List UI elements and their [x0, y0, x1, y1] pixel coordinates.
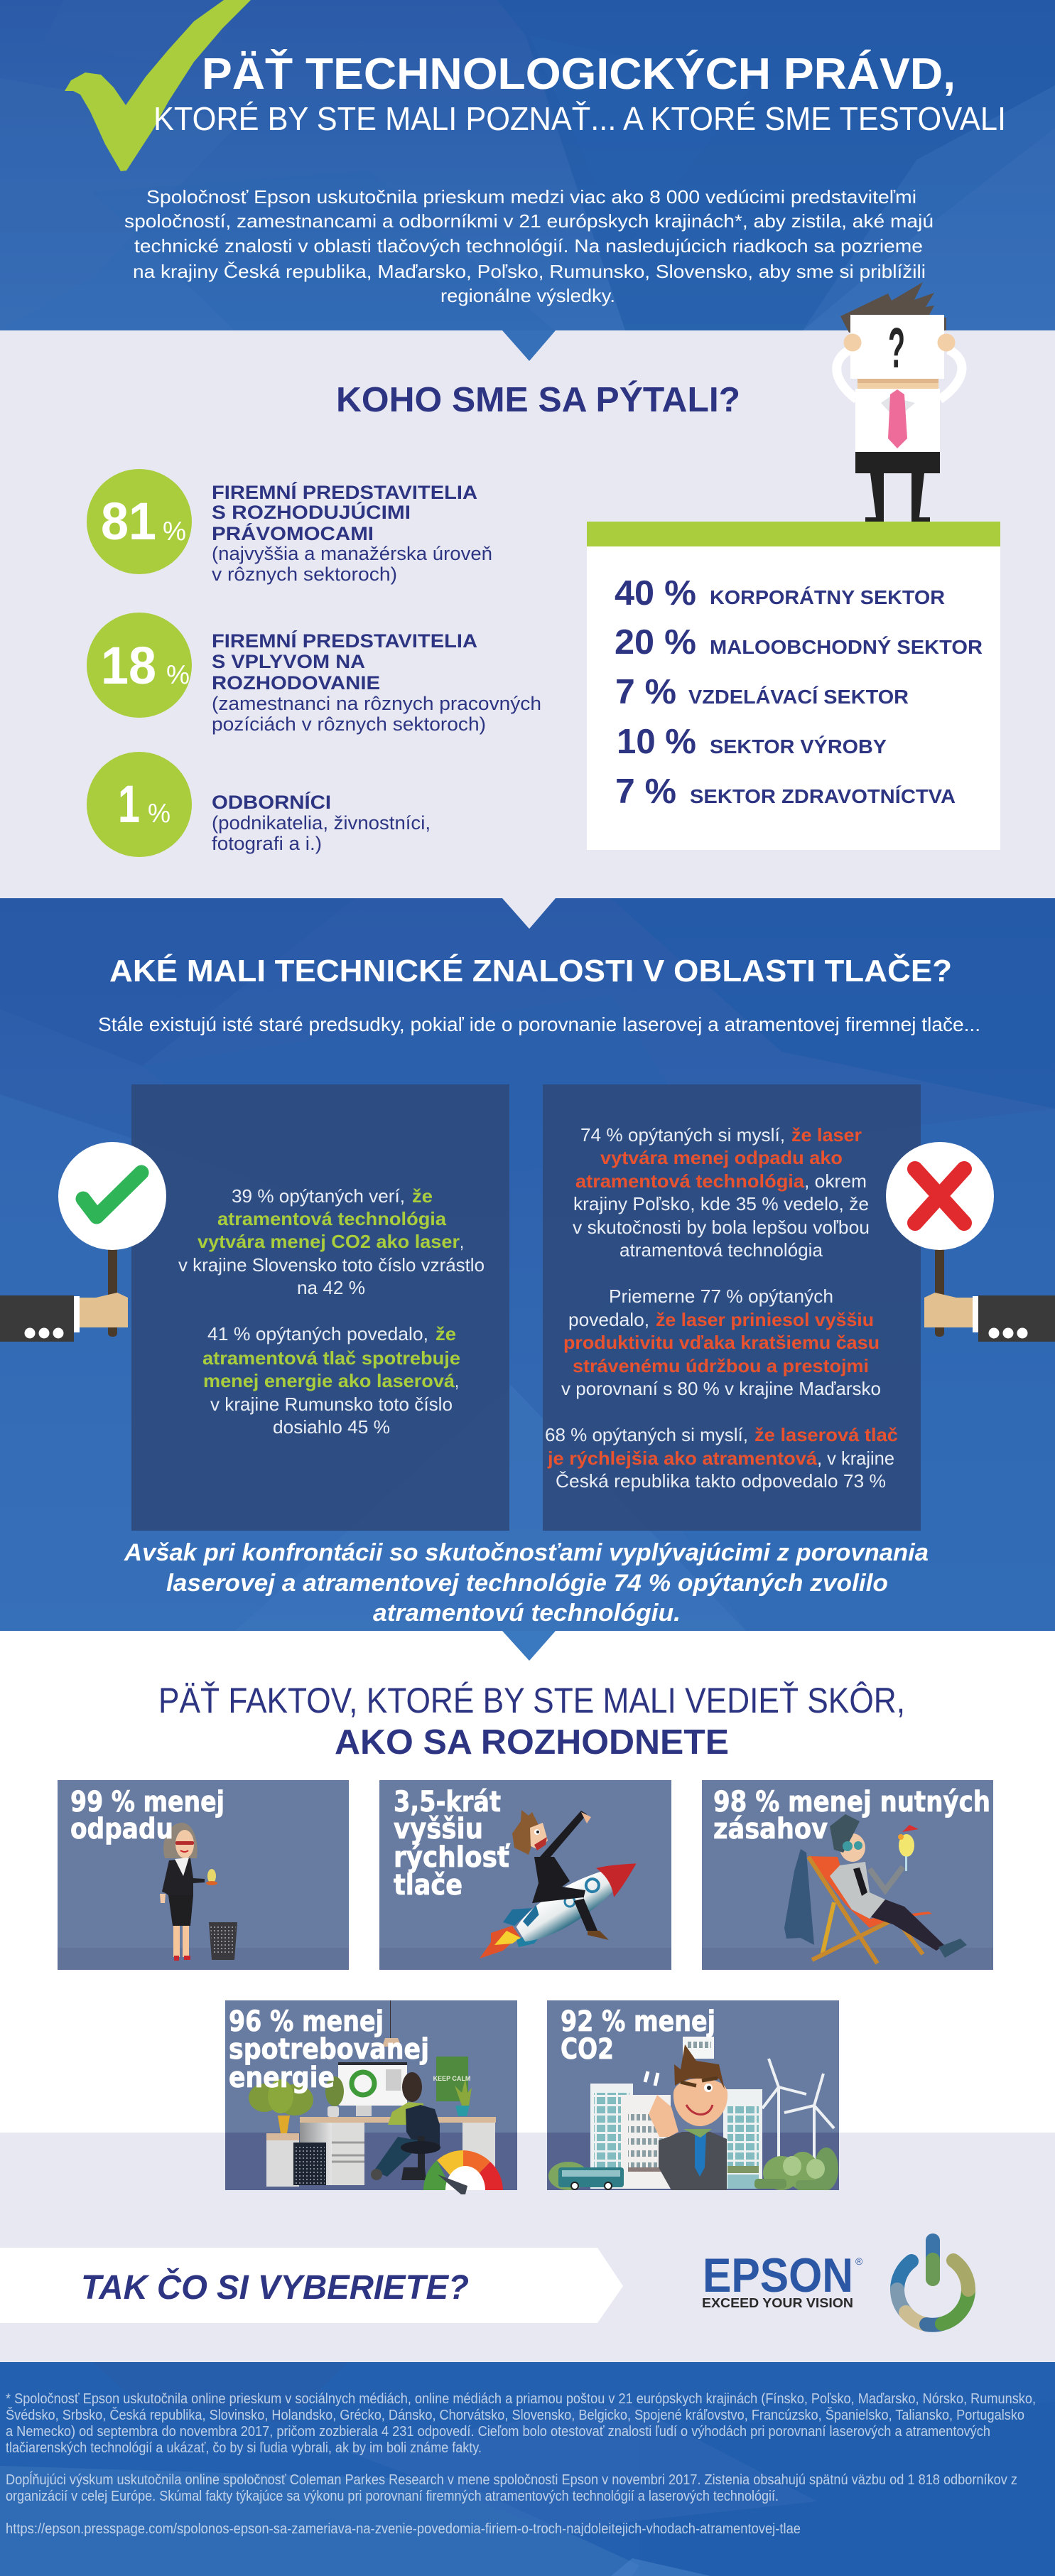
panel: wrong beliefs: krajiny Poľsko, kde 35 % vedelo, že [573, 1193, 869, 1214]
card: 92 percent less CO2: CO2 [561, 2033, 614, 2066]
card: 3.5 times faster: 3,5-krát [394, 1786, 501, 1818]
panel: correct beliefs: vytvára menej CO2 ako laser [198, 1231, 460, 1252]
banner: tak co si vyberiete [0, 2248, 623, 2323]
stat: 81 percent: FIREMNÍ PREDSTAVITELIA [212, 481, 477, 503]
icon: hand holding check sign [0, 1142, 166, 1342]
card: 3.5 times faster: vyššiu [394, 1813, 483, 1845]
panel: correct beliefs: v krajine Slovensko toto číslo vzrástlo [178, 1254, 485, 1276]
intro paragraph: technické znalosti v oblasti tlačových technológií. Na nasledujúcich riadkoch sa pozrieme [134, 235, 923, 257]
illustration: man with city and wind turbines [548, 2037, 838, 2190]
illustration: man holding question mark paper [837, 282, 962, 522]
illustration: man on rocket [480, 1810, 646, 1958]
panel: correct beliefs: atramentová tlač spotrebuje [202, 1347, 460, 1369]
panel: sectors: 7 % [615, 772, 676, 811]
intro paragraph: na krajiny Česká republika, Maďarsko, Poľsko, Rumunsko, Slovensko, aby sme si priblížili [133, 261, 926, 282]
stat: 81 percent: PRÁVOMOCAMI [212, 522, 374, 544]
middle blue faceted background [0, 898, 1055, 1631]
logo: epson: EPSON [703, 2248, 853, 2302]
stat: 81 percent: v rôznych sektoroch) [212, 564, 397, 585]
card: 99 percent less waste [58, 1780, 349, 1970]
stat: 18 percent [87, 613, 541, 735]
stat: 18 percent: % [166, 660, 190, 690]
panel: correct beliefs: atramentová technológia [217, 1208, 447, 1229]
panel: sectors: 10 % [617, 723, 696, 761]
panel: wrong beliefs: strávenému údržbou a prestojmi [573, 1355, 869, 1376]
panel: wrong beliefs: Česká republika takto odpovedalo 73 % [556, 1470, 886, 1492]
heading: pat faktov: AKO SA ROZHODNETE [335, 1723, 729, 1762]
panel: correct beliefs: menej energie ako laserová [203, 1370, 455, 1391]
card: 99 percent less waste: 99 % menej [70, 1786, 224, 1818]
footer notes: tlačiarenských technológií a ukázať, čo by si ľudia vybrali, ak by im boli známe fakty. [6, 2440, 482, 2456]
icon: hand holding cross sign [886, 1142, 1055, 1342]
panel: wrong beliefs: , v krajine [817, 1448, 894, 1469]
panel: wrong beliefs [543, 1084, 921, 1531]
card: 99 percent less waste: odpadu [70, 1813, 173, 1845]
panel: wrong beliefs: povedalo, [568, 1309, 649, 1330]
panel: correct beliefs: 39 % opýtaných verí, [232, 1185, 405, 1207]
card: 92 percent less CO2: 92 % menej [561, 2005, 715, 2038]
footer blue faceted background [0, 2362, 1055, 2576]
conclusion text [124, 1539, 929, 1627]
illustration: woman with apple core and bin [160, 1823, 237, 1961]
footer notes: https://epson.presspage.com/spolonos-epson-sa-zameriava-na-zvenie-povedomia-firiem-o-troch-najdoleitejich-vhodach-atramentovej-tlae [6, 2521, 801, 2537]
panel: correct beliefs: že [412, 1185, 433, 1207]
intro paragraph [124, 186, 934, 306]
conclusion text: atramentovú technológiu. [373, 1600, 681, 1627]
panel: sectors: 20 % [615, 623, 696, 662]
panel: wrong beliefs: že laser priniesol vyššiu [656, 1309, 874, 1330]
stat: 81 percent: (najvyššia a manažérska úroveň [212, 543, 492, 564]
banner: tak co si vyberiete: TAK ČO SI VYBERIETE? [81, 2268, 469, 2307]
card: 98 percent fewer interventions [702, 1780, 993, 1970]
icon: large green check mark [65, 0, 251, 171]
icon: earth power symbol [897, 2241, 968, 2325]
stat: 18 percent: S VPLYVOM NA [212, 651, 365, 672]
intro paragraph: Spoločnosť Epson uskutočnila prieskum medzi viac ako 8 000 vedúcimi predstaviteľmi [146, 186, 916, 208]
panel: sectors: SEKTOR ZDRAVOTNÍCTVA [690, 785, 956, 807]
stat: 1 percent: % [148, 799, 171, 829]
panel: correct beliefs: , [460, 1231, 464, 1252]
panel: sectors [587, 522, 1000, 850]
card: 96 percent less energy: spotrebovanej [229, 2033, 429, 2066]
stat: 1 percent: 1 [118, 775, 140, 834]
stat: 1 percent: fotografi a i.) [212, 833, 322, 854]
panel: wrong beliefs: atramentová technológia [620, 1239, 823, 1261]
stat: 18 percent: (zamestnanci na rôznych pracovných [212, 693, 541, 714]
heading: pat faktov: PÄŤ FAKTOV, KTORÉ BY STE MALI VEDIEŤ SKÔR, [158, 1681, 905, 1720]
card: 3.5 times faster [379, 1780, 671, 1970]
panel: correct beliefs: na 42 % [297, 1277, 365, 1298]
stat: 81 percent: S ROZHODUJÚCIMI [212, 501, 411, 523]
logo: epson: ® [855, 2256, 863, 2267]
panel: wrong beliefs: je rýchlejšia ako atramentová [547, 1448, 818, 1469]
panel: sectors: MALOOBCHODNÝ SEKTOR [710, 636, 983, 658]
panel: wrong beliefs: v porovnaní s 80 % v krajine Maďarsko [561, 1378, 881, 1399]
illustration: man relaxing in deck chair [784, 1814, 967, 1963]
panel: correct beliefs: 41 % opýtaných povedalo, [207, 1323, 428, 1344]
panel: wrong beliefs: že laser [791, 1124, 862, 1146]
stat: 1 percent: ODBORNÍCI [212, 791, 331, 813]
lavender pointer triangle [502, 898, 556, 929]
panel: sectors: 7 % [615, 673, 676, 711]
panel: correct beliefs [131, 1084, 509, 1531]
subheading: Stále existujú isté staré predsudky, pokiaľ ide o porovnanie laserovej a atramentovej firemnej tlače... [98, 1013, 980, 1035]
panel: wrong beliefs: vytvára menej odpadu ako [600, 1147, 843, 1168]
header pointer triangle [502, 330, 556, 361]
card: 3.5 times faster: rýchlosť [394, 1841, 511, 1874]
title: KTORÉ BY STE MALI POZNAŤ... A KTORÉ SME TESTOVALI [153, 100, 1006, 137]
card: 96 percent less energy: energie [229, 2062, 335, 2094]
intro paragraph: regionálne výsledky. [440, 285, 615, 306]
conclusion text: Avšak pri konfrontácii so skutočnosťami vyplývajúcimi z porovnania [124, 1539, 929, 1566]
header blue faceted background [0, 0, 1055, 361]
panel: wrong beliefs: , okrem [804, 1170, 867, 1192]
card: 98 percent fewer interventions: zásahov [713, 1813, 828, 1845]
panel: wrong beliefs: že laserová tlač [754, 1424, 898, 1445]
panel: correct beliefs: že [435, 1323, 456, 1344]
card: 3.5 times faster: tlače [394, 1869, 462, 1902]
logo: epson: EXCEED YOUR VISION [702, 2295, 853, 2310]
panel: correct beliefs: dosiahlo 45 % [273, 1416, 390, 1438]
title [153, 50, 1006, 137]
stat: 18 percent: 18 [101, 636, 156, 695]
illustration: office desk scene: KEEP CALM [433, 2075, 470, 2082]
intro paragraph: spoločností, zamestnancami a odborníkmi v 21 európskych krajinách*, aby zistila, aké majú [124, 210, 934, 232]
stat: 18 percent: pozíciách v rôznych sektoroch) [212, 713, 486, 735]
panel: wrong beliefs: Priemerne 77 % opýtaných [609, 1286, 833, 1307]
panel: correct beliefs: , [455, 1370, 459, 1391]
stat: 81 percent: 81 [101, 492, 156, 551]
card: 98 percent fewer interventions: 98 % menej nutných [713, 1786, 990, 1818]
panel: wrong beliefs: v skutočnosti by bola lepšou voľbou [573, 1217, 870, 1238]
footer notes: organizácií v celej Európe. Skúmal fakty týkajúce sa výkonu pri porovnaní firemných atramentových technológií a laserových technológií. [6, 2489, 779, 2504]
stat: 1 percent: (podnikatelia, živnostníci, [212, 812, 431, 834]
panel: sectors: SEKTOR VÝROBY [710, 735, 887, 758]
heading: technicke znalosti: AKÉ MALI TECHNICKÉ ZNALOSTI V OBLASTI TLAČE? [109, 952, 952, 988]
stat: 81 percent [87, 469, 492, 585]
heading: koho sme sa pytali: KOHO SME SA PÝTALI? [336, 381, 740, 419]
panel: wrong beliefs: 74 % opýtaných si myslí, [580, 1124, 785, 1146]
panel: wrong beliefs: produktivitu vďaka kratšiemu času [563, 1332, 880, 1353]
panel: sectors: KORPORÁTNY SEKTOR [710, 586, 945, 608]
panel: wrong beliefs: 68 % opýtaných si myslí, [545, 1424, 748, 1445]
stat: 18 percent: FIREMNÍ PREDSTAVITELIA [212, 630, 477, 652]
panel: wrong beliefs: atramentová technológia [575, 1170, 805, 1192]
panel: sectors: VZDELÁVACÍ SEKTOR [688, 686, 909, 708]
illustration: office desk scene [249, 2000, 503, 2194]
footer notes [6, 2391, 1036, 2537]
panel: sectors: 40 % [615, 574, 696, 613]
panel: correct beliefs: v krajine Rumunsko toto číslo [210, 1394, 453, 1415]
blue pointer triangle [502, 1631, 556, 1661]
card: 96 percent less energy: 96 % menej [229, 2005, 384, 2038]
stat: 1 percent [87, 752, 431, 857]
illustration: man holding question mark paper: ? [888, 316, 905, 379]
card: 92 percent less CO2 [547, 2000, 839, 2190]
stat: 81 percent: % [163, 517, 186, 546]
card: 96 percent less energy [225, 2000, 517, 2194]
title: PÄŤ TECHNOLOGICKÝCH PRÁVD, [202, 50, 956, 99]
conclusion text: laserovej a atramentovej technológie 74 % opýtaných zvolilo [166, 1570, 888, 1597]
heading: pat faktov [158, 1681, 905, 1762]
stat: 18 percent: ROZHODOVANIE [212, 672, 380, 694]
